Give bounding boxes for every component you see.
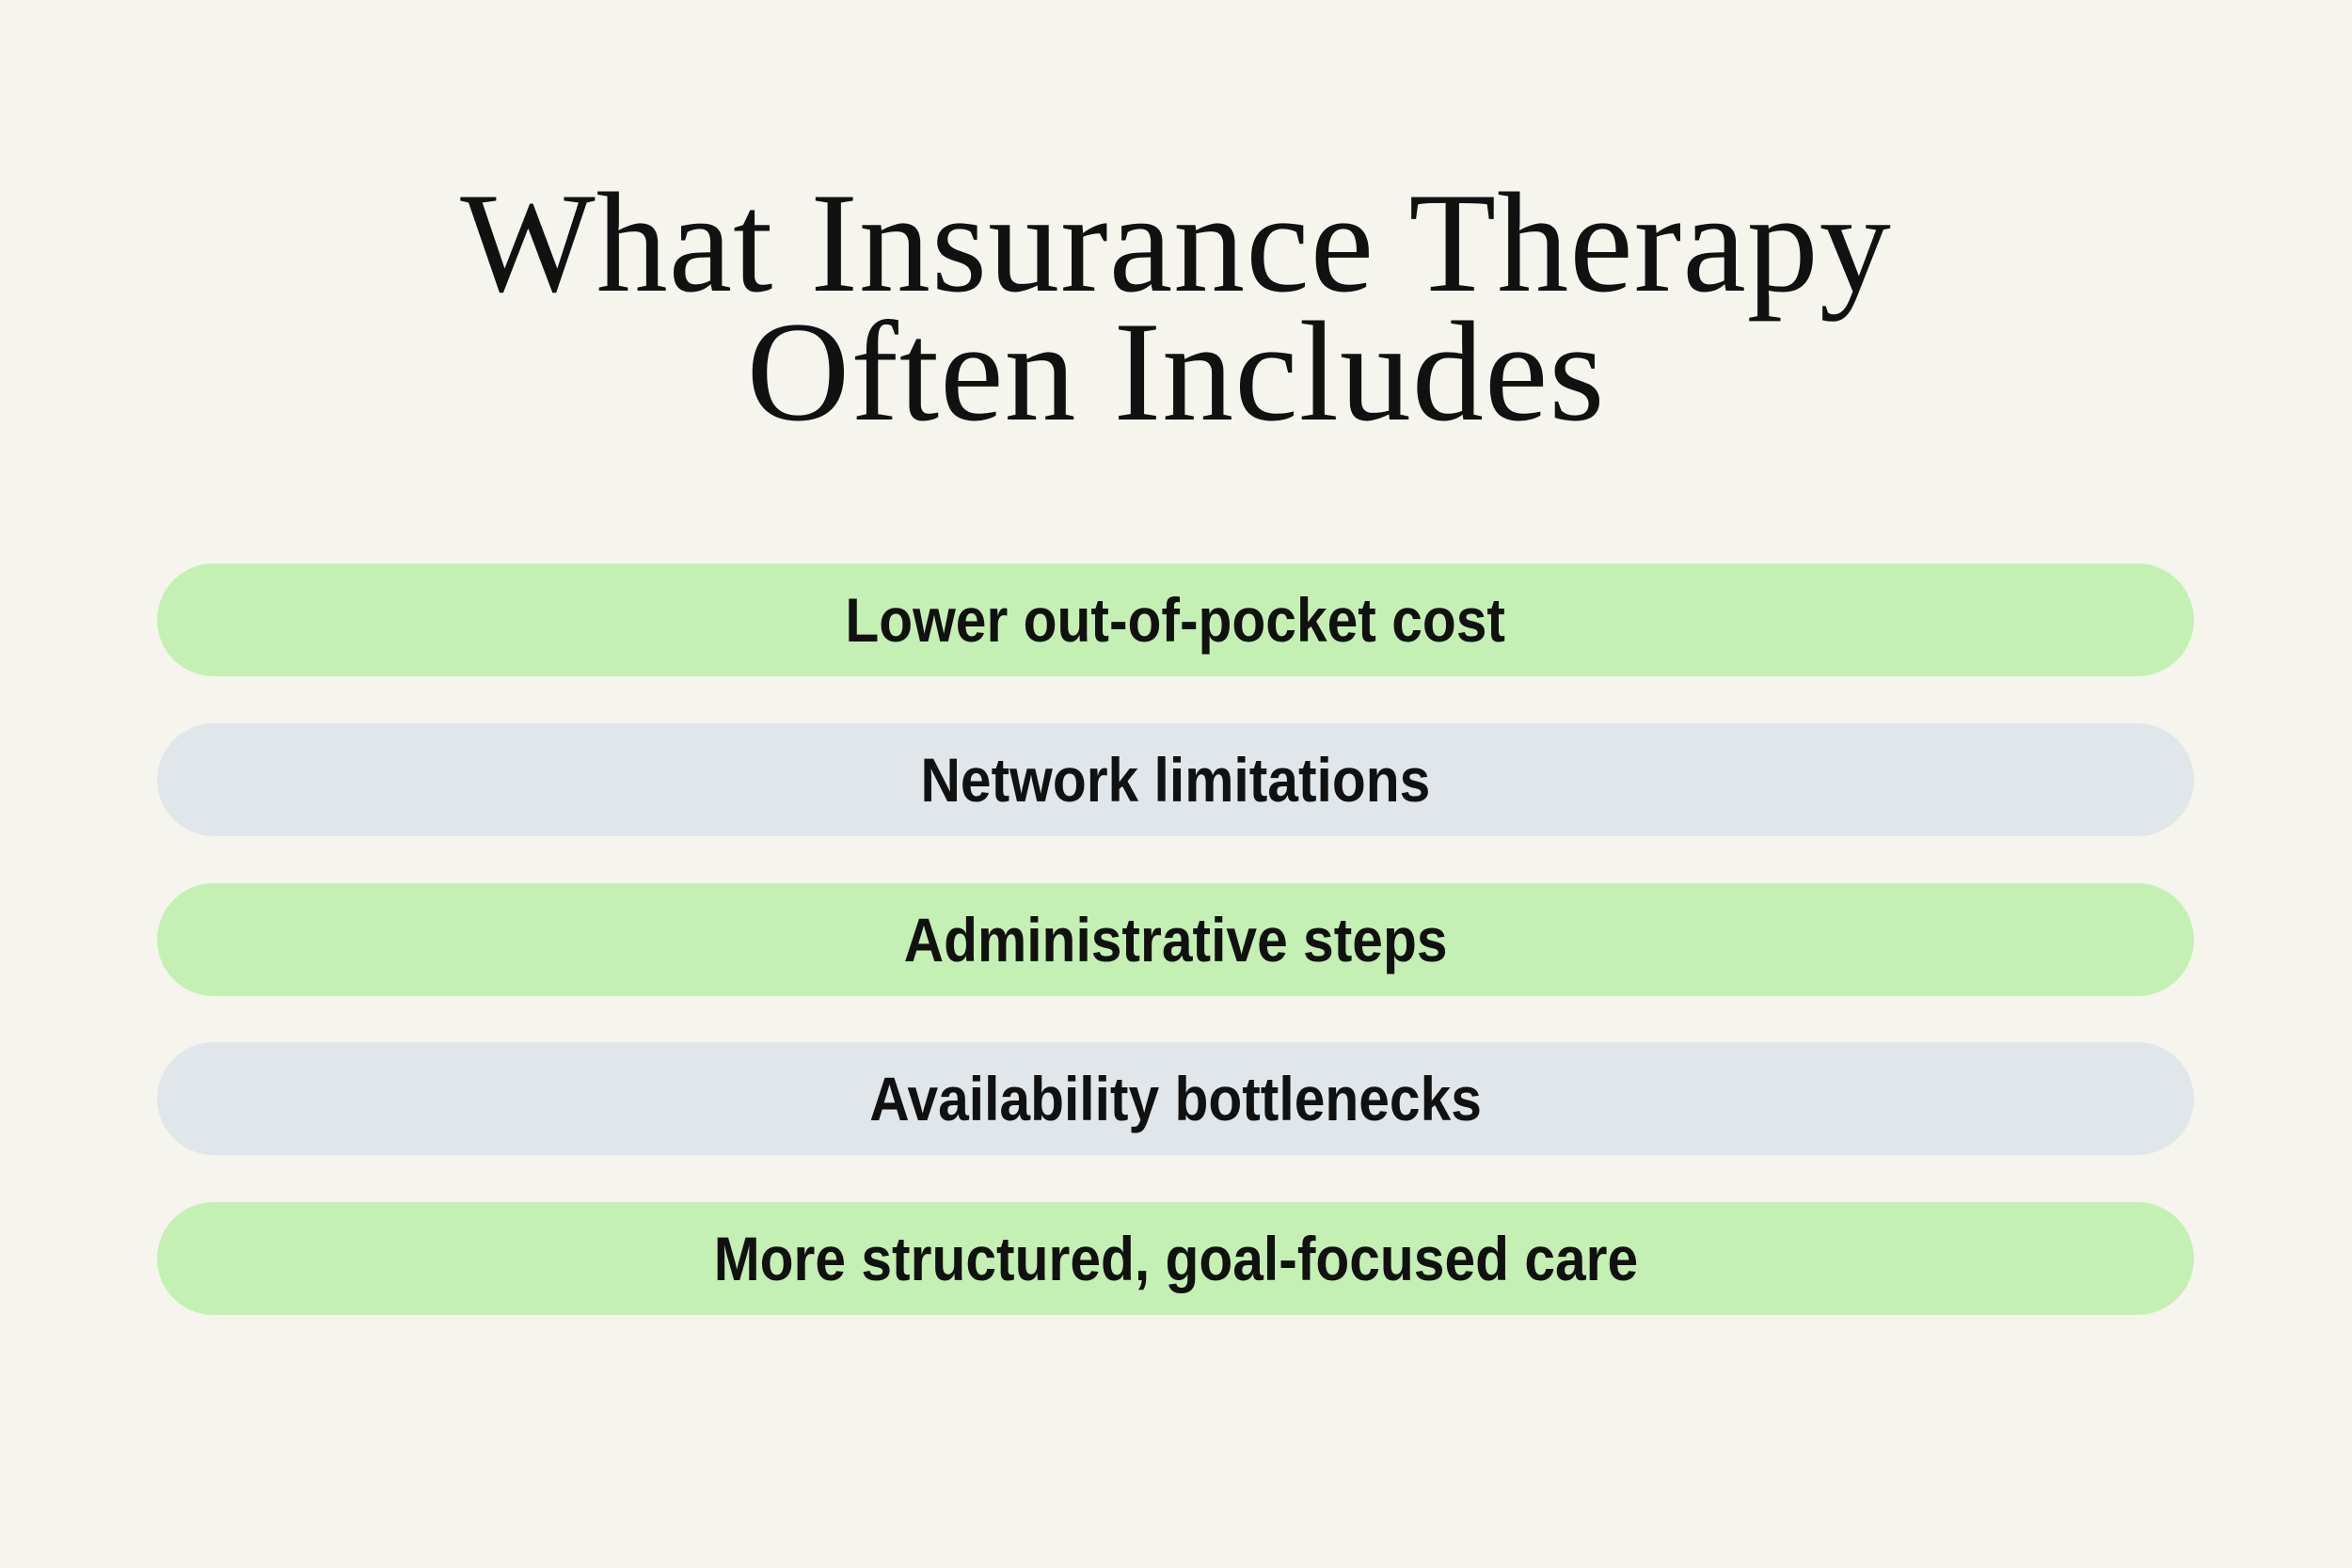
title: Often Includes (746, 293, 1605, 451)
bar: network limitations: Network limitations (921, 745, 1430, 815)
bar: more structured care (157, 1202, 2194, 1315)
bar: administrative steps (157, 883, 2194, 996)
bar: administrative steps: Administrative steps (904, 905, 1447, 974)
bar: lower out-of-pocket cost: Lower out-of-pocket cost (846, 585, 1505, 655)
title: What Insurance Therapy (460, 164, 1892, 322)
title (460, 164, 1892, 451)
bar: more structured care: More structured, goal-focused care (713, 1224, 1638, 1293)
bar: availability bottlenecks (157, 1042, 2194, 1155)
bar: availability bottlenecks: Availability bottlenecks (869, 1064, 1482, 1133)
bar: lower out-of-pocket cost (157, 563, 2194, 676)
bar: network limitations (157, 723, 2194, 836)
